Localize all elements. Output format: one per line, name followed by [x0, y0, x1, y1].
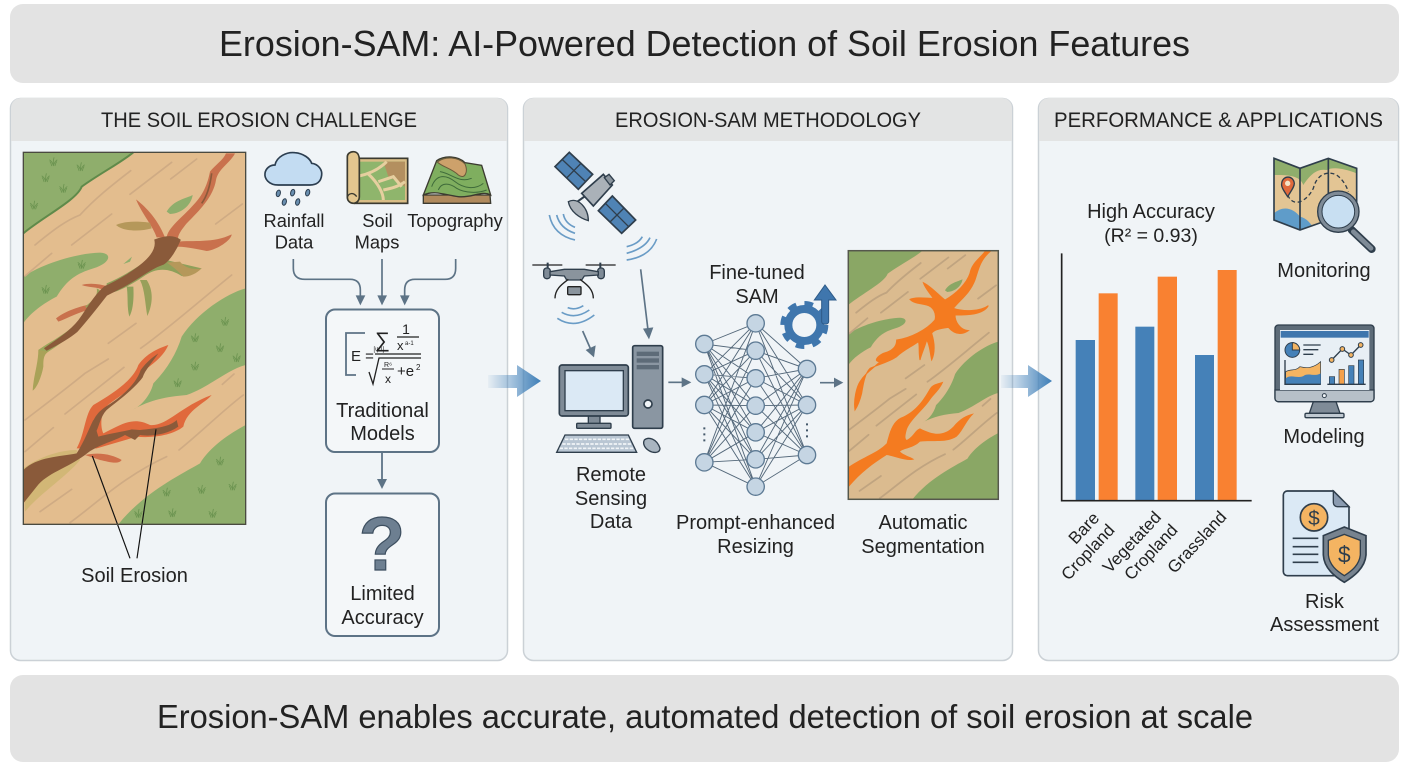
- equation: [346, 321, 421, 386]
- equation: R⁶: [384, 362, 392, 369]
- arrows: data sources to computer: [583, 269, 653, 357]
- box: traditional models: [326, 310, 439, 452]
- arrow: computer to network: [668, 377, 691, 387]
- icon: satellite: [549, 152, 657, 260]
- icon: risk assessment document with shield: [1283, 491, 1366, 582]
- title: Erosion-SAM: AI-Powered Detection of Soil Erosion Features: [219, 23, 1190, 64]
- label: monitoring: Monitoring: [1277, 260, 1371, 282]
- equation: 1: [402, 321, 410, 337]
- icon: gear with up arrow: [784, 285, 836, 345]
- label: soil erosion: Soil Erosion: [81, 565, 188, 587]
- neural network diagram: [696, 315, 816, 495]
- icon: soil map scroll: [347, 152, 408, 203]
- icon: desktop computer: [557, 346, 663, 452]
- equation: E =: [351, 348, 374, 365]
- segmentation map: [848, 251, 998, 499]
- panel heading: PERFORMANCE & APPLICATIONS: [1054, 109, 1383, 132]
- soil erosion map illustration: [23, 152, 246, 558]
- conclusion banner: [10, 675, 1399, 762]
- label: automatic segmentation: Automatic: [879, 512, 967, 534]
- equation: [ψ1]: [374, 347, 385, 353]
- axis label: vegetated cropland: Vegetated: [1099, 508, 1165, 577]
- label: remote sensing data: Remote: [576, 464, 646, 486]
- label: prompt-enhanced resizing: Resizing: [717, 536, 794, 558]
- panel: the soil erosion challenge: [10, 98, 508, 660]
- axis label: bare cropland: Bare: [1065, 509, 1103, 548]
- label: rainfall data: Rainfall: [264, 210, 324, 231]
- label: traditional models: Models: [350, 423, 415, 445]
- segmented erosion mask: [849, 252, 990, 487]
- label: soil maps: Soil: [362, 210, 393, 231]
- icon: drone: [532, 263, 616, 323]
- arrows: inputs to traditional models: [293, 259, 456, 305]
- label: prompt-enhanced resizing: Prompt-enhanced: [676, 512, 835, 534]
- icon: topography terrain: [423, 157, 491, 203]
- label: limited accuracy: Accuracy: [341, 607, 424, 629]
- label: rainfall data: Data: [275, 232, 314, 252]
- label: remote sensing data: Sensing: [575, 488, 647, 510]
- arrow: models to accuracy: [377, 452, 387, 489]
- panel: erosion-sam methodology: [524, 98, 1012, 660]
- panel: performance and applications: [1038, 98, 1398, 660]
- arrow: methodology to performance: [1001, 365, 1052, 397]
- label: soil maps: Maps: [355, 232, 399, 252]
- lower gully: [23, 345, 212, 512]
- label: risk assessment: Risk: [1305, 591, 1345, 613]
- label: remote sensing data: Data: [590, 511, 633, 533]
- equation: +e: [397, 363, 414, 380]
- annotation lines: [92, 429, 156, 558]
- icon: question mark: ?: [359, 502, 405, 587]
- icon: risk assessment document with shield: $: [1338, 541, 1351, 567]
- label: risk assessment: Assessment: [1270, 614, 1379, 636]
- label: topography: Topography: [407, 210, 504, 231]
- icon: risk assessment document with shield: $: [1308, 507, 1320, 530]
- axis label: bare cropland: Cropland: [1058, 521, 1118, 584]
- icon: monitoring map with magnifier: [1274, 158, 1372, 249]
- label: fine-tuned sam: Fine-tuned: [709, 262, 805, 284]
- icon: modeling dashboard monitor: [1275, 325, 1374, 418]
- box: limited accuracy: [326, 494, 439, 636]
- conclusion text: Erosion-SAM enables accurate, automated detection of soil erosion at scale: [157, 698, 1253, 735]
- upper gully: [33, 153, 235, 391]
- label: automatic segmentation: Segmentation: [861, 536, 985, 558]
- bar chart: [1062, 253, 1252, 501]
- arrow: challenge to methodology: [488, 365, 541, 397]
- arrow: network to segmentation: [820, 378, 843, 388]
- label: limited accuracy: Limited: [350, 583, 415, 605]
- equation: x: [397, 338, 404, 353]
- icon: rainfall cloud: [265, 153, 322, 206]
- equation: a-1: [405, 341, 414, 347]
- equation: 2: [416, 363, 421, 372]
- label: modeling: Modeling: [1283, 426, 1365, 448]
- panel heading: THE SOIL EROSION CHALLENGE: [101, 109, 417, 132]
- label: traditional models: Traditional: [336, 400, 429, 422]
- chart title: (R² = 0.93): [1104, 225, 1198, 247]
- chart title: High Accuracy: [1087, 201, 1215, 223]
- panel heading: EROSION-SAM METHODOLOGY: [615, 109, 921, 132]
- axis label: vegetated cropland: Cropland: [1121, 521, 1181, 584]
- title banner: [10, 4, 1399, 83]
- equation: ∑: [375, 329, 390, 352]
- axis label: grassland: Grassland: [1164, 507, 1230, 577]
- label: fine-tuned sam: SAM: [735, 286, 779, 308]
- equation: x: [385, 372, 391, 386]
